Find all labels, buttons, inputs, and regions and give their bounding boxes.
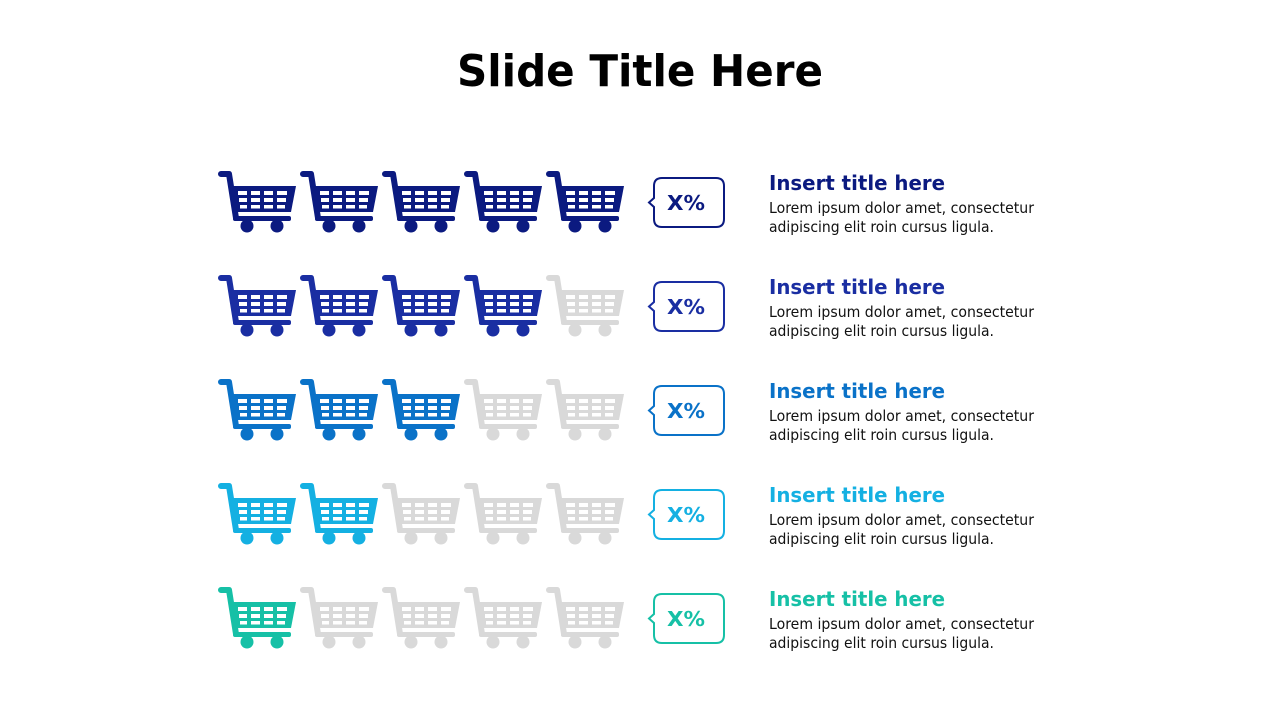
text row 1: adipiscing elit roin cursus ligula.: [769, 218, 994, 236]
cart icons row 3: [221, 382, 624, 440]
callout row 3: X%: [667, 399, 705, 423]
text row 2: [769, 275, 1035, 340]
row 5: [221, 587, 1035, 652]
text row 5: Lorem ipsum dolor amet, consectetur: [769, 615, 1035, 633]
text row 5: Insert title here: [769, 587, 945, 611]
text row 4: [769, 483, 1035, 548]
callout row 1: X%: [667, 191, 705, 215]
callout row 1: [649, 178, 724, 227]
text row 4: Insert title here: [769, 483, 945, 507]
callout row 4: X%: [667, 503, 705, 527]
callout row 3: [649, 386, 724, 435]
callout row 5: [649, 594, 724, 643]
text row 1: [769, 171, 1035, 236]
text row 3: Insert title here: [769, 379, 945, 403]
text row 2: Insert title here: [769, 275, 945, 299]
text row 2: Lorem ipsum dolor amet, consectetur: [769, 303, 1035, 321]
row 2: [221, 275, 1035, 340]
cart icons row 5: [221, 590, 624, 648]
title: Slide Title Here: [457, 46, 823, 97]
text row 5: adipiscing elit roin cursus ligula.: [769, 634, 994, 652]
cart icons row 1: [221, 174, 624, 232]
row 3: [221, 379, 1035, 444]
callout row 2: [649, 282, 724, 331]
cart icons row 4: [221, 486, 624, 544]
text row 5: [769, 587, 1035, 652]
cart icons row 2: [221, 278, 624, 336]
text row 4: Lorem ipsum dolor amet, consectetur: [769, 511, 1035, 529]
callout row 5: X%: [667, 607, 705, 631]
text row 4: adipiscing elit roin cursus ligula.: [769, 530, 994, 548]
text row 3: Lorem ipsum dolor amet, consectetur: [769, 407, 1035, 425]
text row 3: adipiscing elit roin cursus ligula.: [769, 426, 994, 444]
row 4: [221, 483, 1035, 548]
text row 3: [769, 379, 1035, 444]
text row 1: Insert title here: [769, 171, 945, 195]
callout row 2: X%: [667, 295, 705, 319]
callout row 4: [649, 490, 724, 539]
row 1: [221, 171, 1035, 236]
text row 1: Lorem ipsum dolor amet, consectetur: [769, 199, 1035, 217]
text row 2: adipiscing elit roin cursus ligula.: [769, 322, 994, 340]
